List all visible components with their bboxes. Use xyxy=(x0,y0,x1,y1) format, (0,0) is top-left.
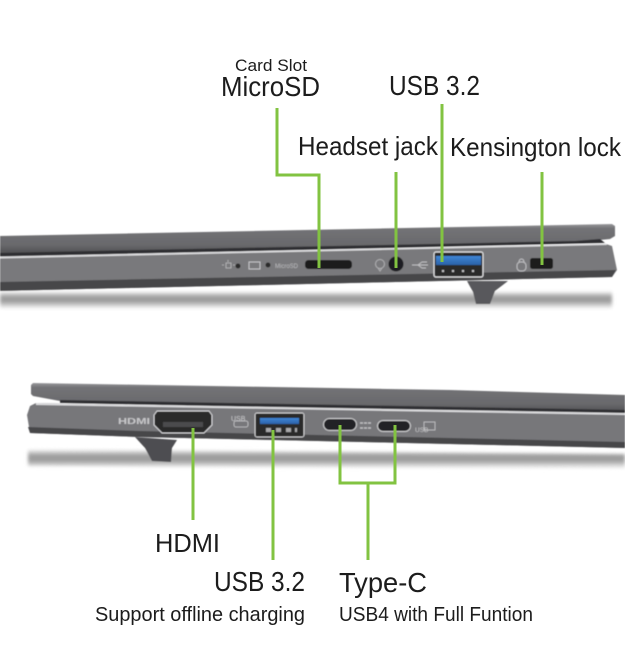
Type-C port 2 xyxy=(378,420,410,432)
USB 3.2 port xyxy=(434,252,483,277)
label: Support offline charging: Support offline charging xyxy=(95,604,305,626)
Type-C port 1 xyxy=(324,418,356,430)
headset jack xyxy=(376,256,404,272)
foot xyxy=(467,281,508,304)
USB SS icon xyxy=(231,416,248,427)
lid xyxy=(0,224,615,254)
label: USB 3.2 bottom: USB 3.2 xyxy=(214,566,305,597)
status icons: MicroSD xyxy=(275,264,299,270)
Thunderbolt icon xyxy=(360,423,371,428)
shadow xyxy=(28,449,625,469)
status icons xyxy=(222,260,299,270)
USB 3.2 port xyxy=(255,413,304,437)
base xyxy=(0,244,617,291)
label: HDMI: HDMI xyxy=(155,528,220,558)
label: Headset jack: Headset jack xyxy=(298,131,439,161)
lid xyxy=(31,383,625,413)
label: Type-C: Type-C xyxy=(339,567,427,598)
USB display icon xyxy=(415,422,435,434)
label: Card Slot: Card Slot xyxy=(235,56,307,75)
label: MicroSD: MicroSD xyxy=(221,71,320,102)
callout lines: bottom xyxy=(193,425,395,560)
panel: bottom laptop side view xyxy=(27,383,625,469)
MicroSD slot xyxy=(305,260,352,269)
USB SS icon: USB xyxy=(231,416,246,423)
HDMI port xyxy=(154,411,212,433)
foot xyxy=(135,437,177,462)
USB display icon: USB xyxy=(415,427,428,434)
callout lines: top xyxy=(277,104,542,268)
USB icon xyxy=(412,262,428,268)
panel: top laptop side view xyxy=(0,224,617,309)
shadow xyxy=(0,291,612,309)
base xyxy=(27,403,625,448)
label: USB 3.2 top: USB 3.2 xyxy=(389,70,480,101)
label: USB4 with Full Funtion: USB4 with Full Funtion xyxy=(339,604,533,626)
HDMI label: HDMI xyxy=(118,417,150,426)
Kensington lock xyxy=(517,258,553,271)
